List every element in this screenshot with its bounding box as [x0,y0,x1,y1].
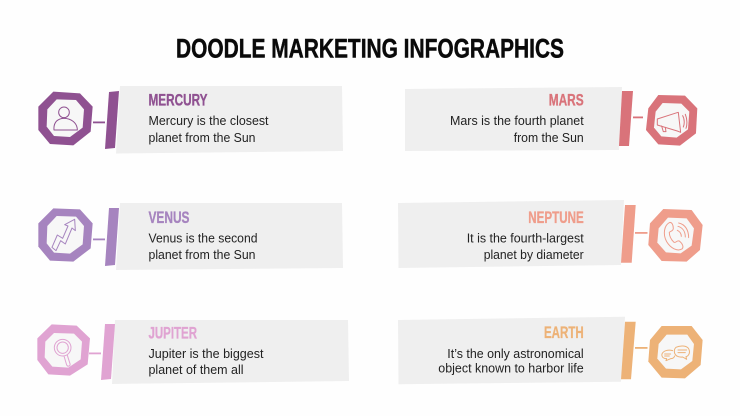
icon: neptune phone [648,209,703,262]
text: mars: Mars is the fourth planet [450,113,584,128]
icon: venus growth arrow [38,208,93,262]
icon: mercury person [38,92,93,145]
text: venus: Venus is the second [148,230,258,245]
panel: mars [405,87,697,151]
text: jupiter: planet of them all [148,362,244,377]
text: mercury: planet from the Sun [148,130,256,145]
text: neptune: planet by diameter [484,247,584,262]
heading: venus: VENUS [148,208,190,227]
icon: earth speech bubbles [648,326,703,378]
heading: mercury: MERCURY [148,91,208,110]
heading: jupiter: JUPITER [148,324,197,343]
text: earth: object known to harbor life [438,360,584,376]
text: neptune: It is the fourth-largest [467,230,584,245]
text: mercury: Mercury is the closest [148,113,269,128]
icon: mars megaphone [646,95,697,146]
text: jupiter: Jupiter is the biggest [148,346,264,361]
panel: earth [398,317,703,384]
panel: neptune [398,200,703,268]
panel: jupiter [37,320,349,384]
heading: earth: EARTH [544,323,584,342]
text: venus: planet from the Sun [148,247,256,262]
heading: neptune: NEPTUNE [528,208,584,227]
text: earth: It’s the only astronomical [447,346,584,361]
panel: venus [38,203,343,270]
title: DOODLE MARKETING INFOGRAPHICS [176,34,564,64]
text: mars: from the Sun [514,130,584,145]
panel: mercury [38,86,343,154]
heading: mars: MARS [549,91,584,110]
icon: jupiter magnifier [37,324,90,376]
